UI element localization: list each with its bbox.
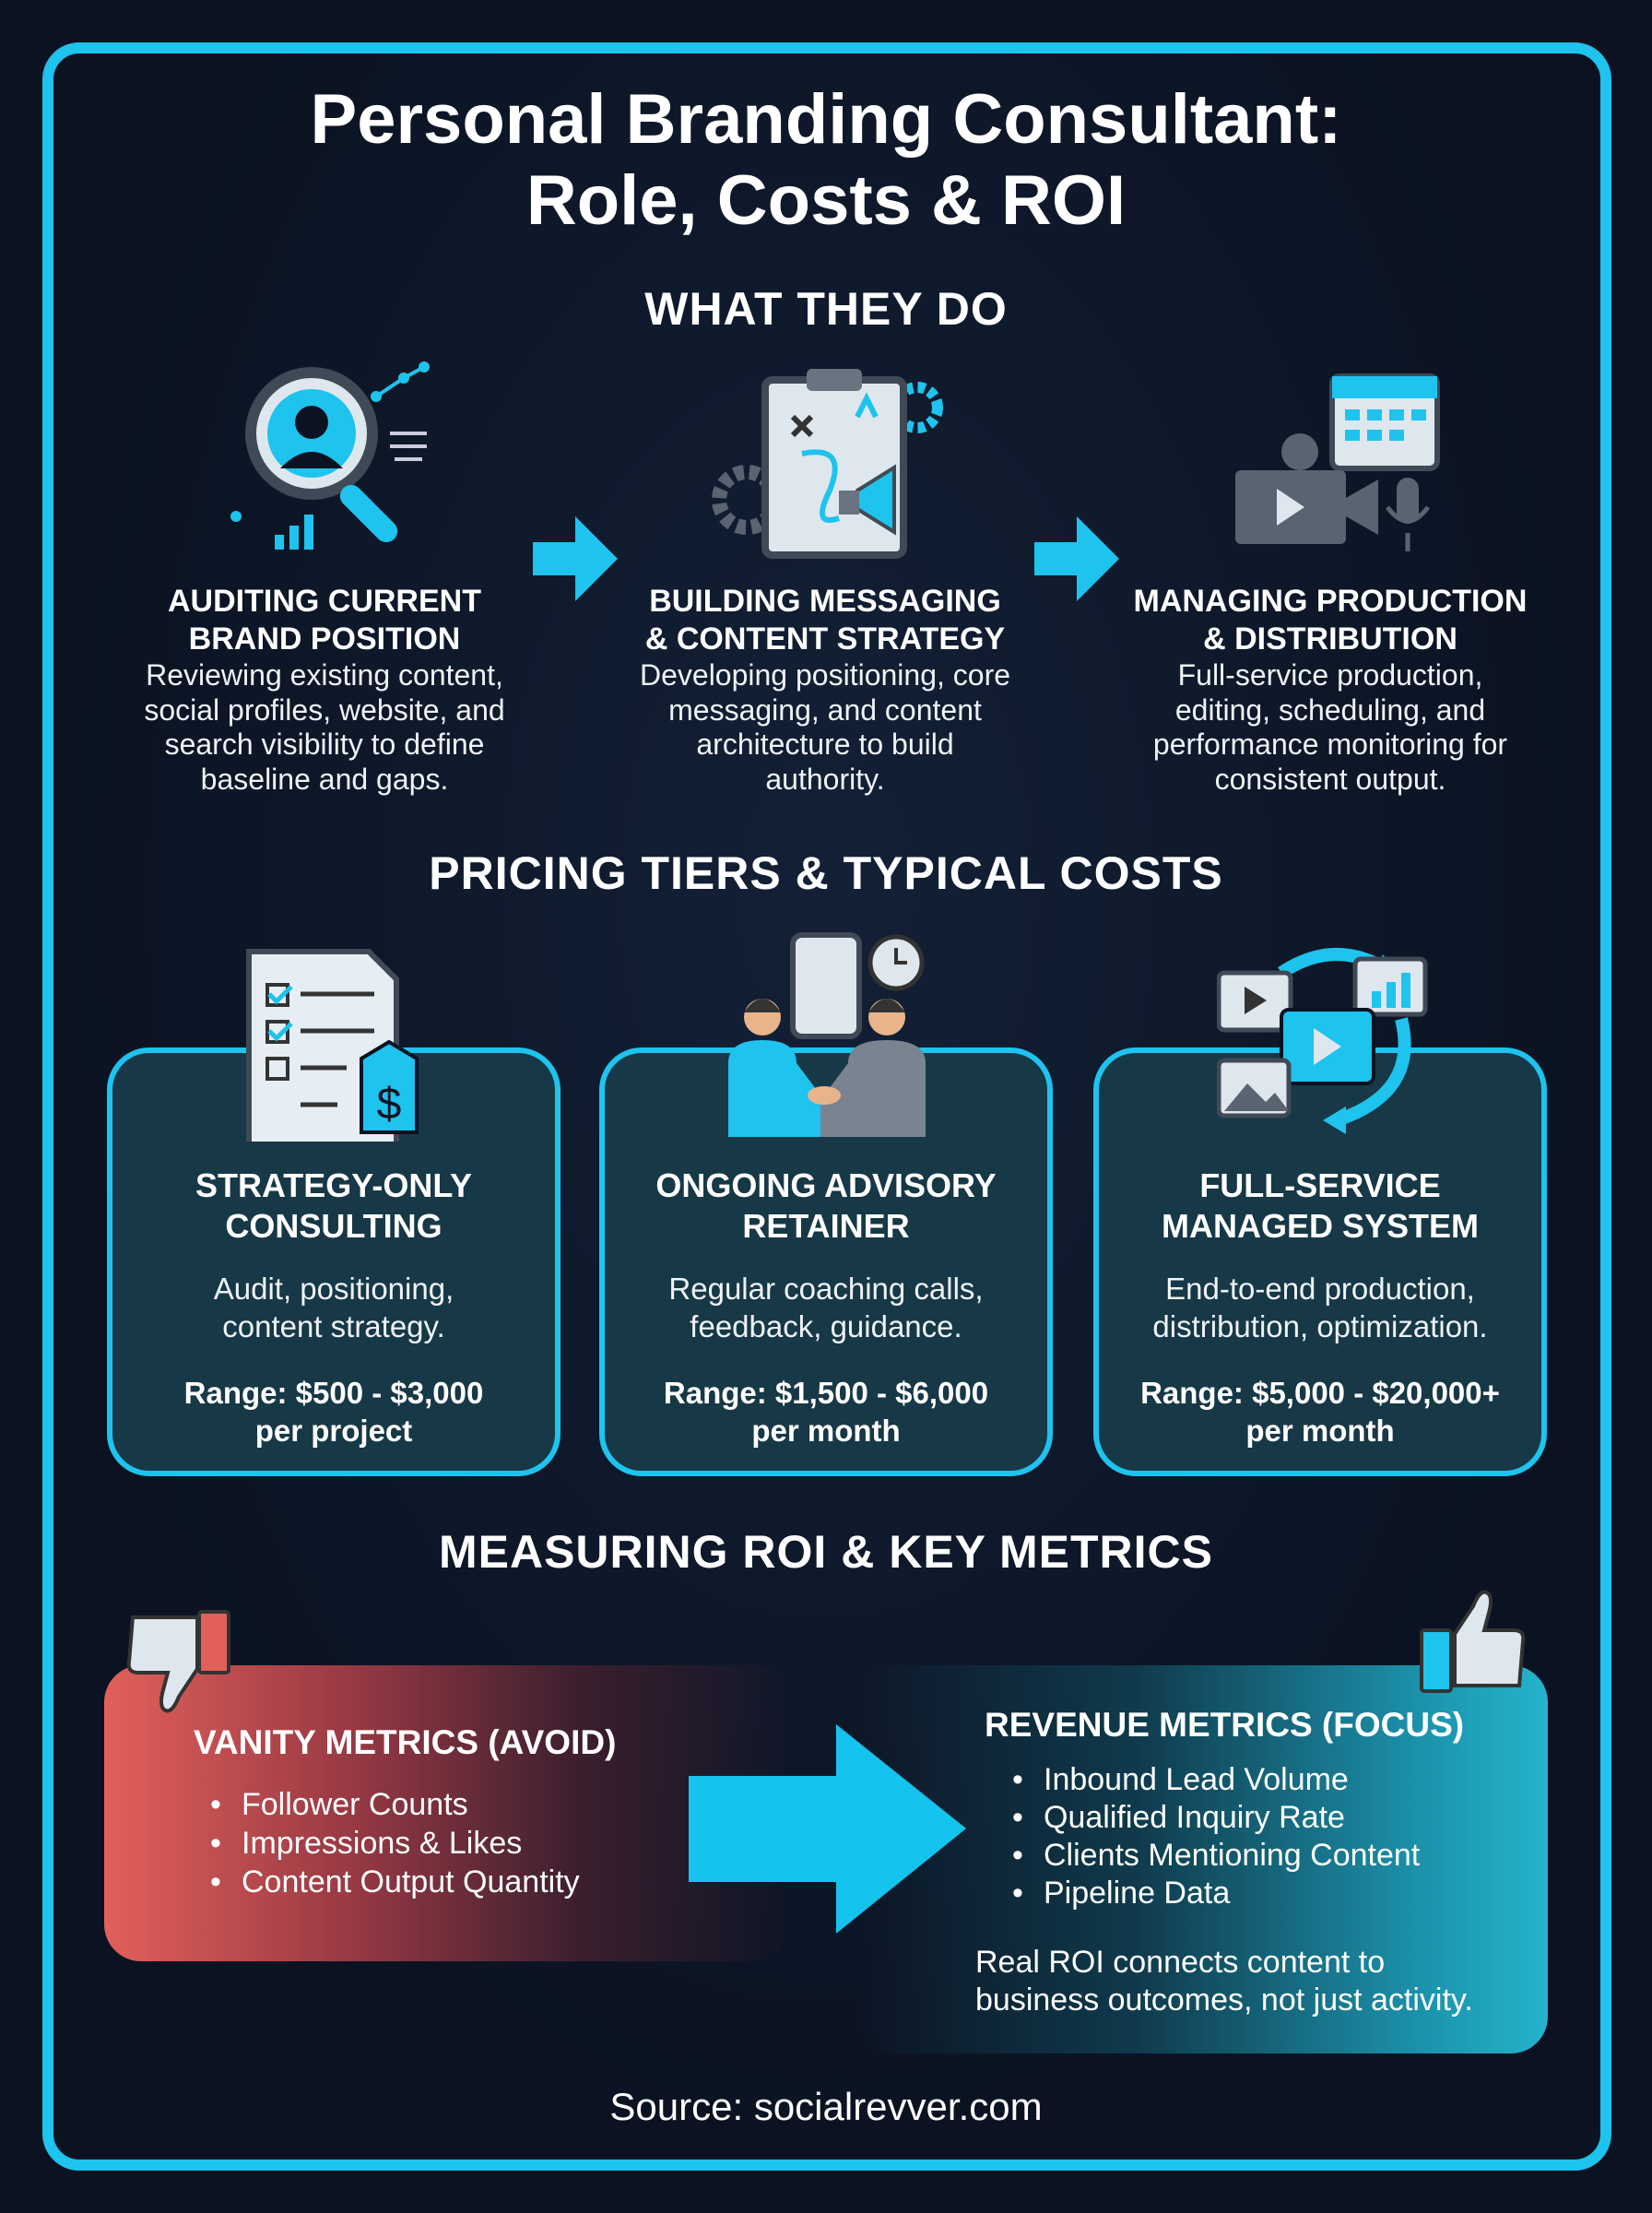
roi note: business outcomes, not just activity. [975,1982,1473,2018]
icon: audit magnifier [230,361,430,550]
vanity list: Impressions & Likes [242,1826,522,1861]
step 3 text: consistent output. [1215,762,1446,795]
vanity list: Follower Counts [242,1787,468,1822]
card 1: Range: $500 - $3,000 [184,1376,483,1410]
step 2 text: architecture to build [696,728,954,761]
step 2 text [640,584,1010,795]
card 1: content strategy. [222,1309,445,1343]
revenue heading: REVENUE METRICS (FOCUS) [985,1706,1464,1744]
card 2: per month [751,1414,901,1448]
step 1 text: search visibility to define [165,728,484,761]
card 1: STRATEGY-ONLY [195,1166,472,1204]
step 3 text: editing, scheduling, and [1175,693,1485,727]
icon: handshake with phone [728,932,926,1137]
card 3: distribution, optimization. [1152,1309,1488,1343]
roi note: Real ROI connects content to [975,1945,1385,1980]
step 1 text [144,584,505,795]
revenue list [1013,1762,1420,1911]
heading: what they do: WHAT THEY DO [644,283,1008,335]
source: Source: socialrevver.com [609,2085,1043,2128]
icon: checklist with price tag: $ [377,1080,401,1129]
card 3: MANAGED SYSTEM [1162,1207,1479,1245]
icon: media cycle [1217,948,1427,1134]
step 1 text: BRAND POSITION [189,621,460,657]
revenue list: Clients Mentioning Content [1044,1838,1420,1873]
step 2 text: authority. [765,762,885,795]
step 1 text: baseline and gaps. [201,762,448,795]
step 2 text: messaging, and content [668,693,982,727]
roi note [975,1945,1473,2018]
title: Personal Branding Consultant: [311,80,1341,159]
step 3 text: Full-service production, [1178,658,1482,692]
icon: thumbs up [1420,1590,1525,1693]
card 3 [1093,1047,1547,1476]
step 3 text: performance monitoring for [1153,728,1507,761]
step 1 text: AUDITING CURRENT [168,584,481,619]
card 1 [107,1047,560,1476]
step 1 text: social profiles, website, and [144,693,505,727]
card 2: RETAINER [742,1207,910,1245]
step 2 text: BUILDING MESSAGING [649,584,1001,619]
card 2 [599,1047,1053,1476]
card 1: Audit, positioning, [214,1272,454,1306]
panel: revenue metrics [861,1665,1548,2053]
card 1: per project [255,1414,412,1448]
arrow 1 [533,516,618,601]
icon: strategy clipboard [712,369,943,559]
icon: thumbs down [127,1610,230,1713]
card 1: CONSULTING [225,1207,442,1245]
card 3: End-to-end production, [1165,1272,1475,1306]
step 2 text: & CONTENT STRATEGY [645,621,1005,657]
step 1 text: Reviewing existing content, [146,658,503,692]
vanity list: Content Output Quantity [242,1864,580,1899]
big arrow [689,1724,966,1934]
step 2 text: Developing positioning, core [640,658,1010,692]
card 2: Range: $1,500 - $6,000 [664,1376,988,1410]
revenue list: Pipeline Data [1044,1876,1230,1911]
title: Role, Costs & ROI [526,161,1126,240]
step 3 text: MANAGING PRODUCTION [1134,584,1527,619]
icon: checklist with price tag [246,949,419,1142]
revenue list: Inbound Lead Volume [1044,1762,1349,1797]
card 3: Range: $5,000 - $20,000+ [1140,1376,1500,1410]
card 2: ONGOING ADVISORY [655,1166,997,1204]
card 3: FULL-SERVICE [1199,1166,1441,1204]
card 2: feedback, guidance. [690,1309,962,1343]
arrow 2 [1034,516,1119,601]
revenue list: Qualified Inquiry Rate [1044,1800,1345,1835]
card 2: Regular coaching calls, [668,1272,984,1306]
vanity list [211,1787,580,1899]
step 3 text [1134,584,1527,795]
title [311,80,1341,240]
icon: production camera calendar [1235,373,1440,551]
heading: pricing: PRICING TIERS & TYPICAL COSTS [429,847,1223,899]
step 3 text: & DISTRIBUTION [1203,621,1457,657]
vanity heading: VANITY METRICS (AVOID) [194,1723,616,1761]
heading: measuring roi: MEASURING ROI & KEY METRICS [439,1526,1213,1578]
panel: vanity metrics [104,1665,790,1961]
card 3: per month [1245,1414,1395,1448]
